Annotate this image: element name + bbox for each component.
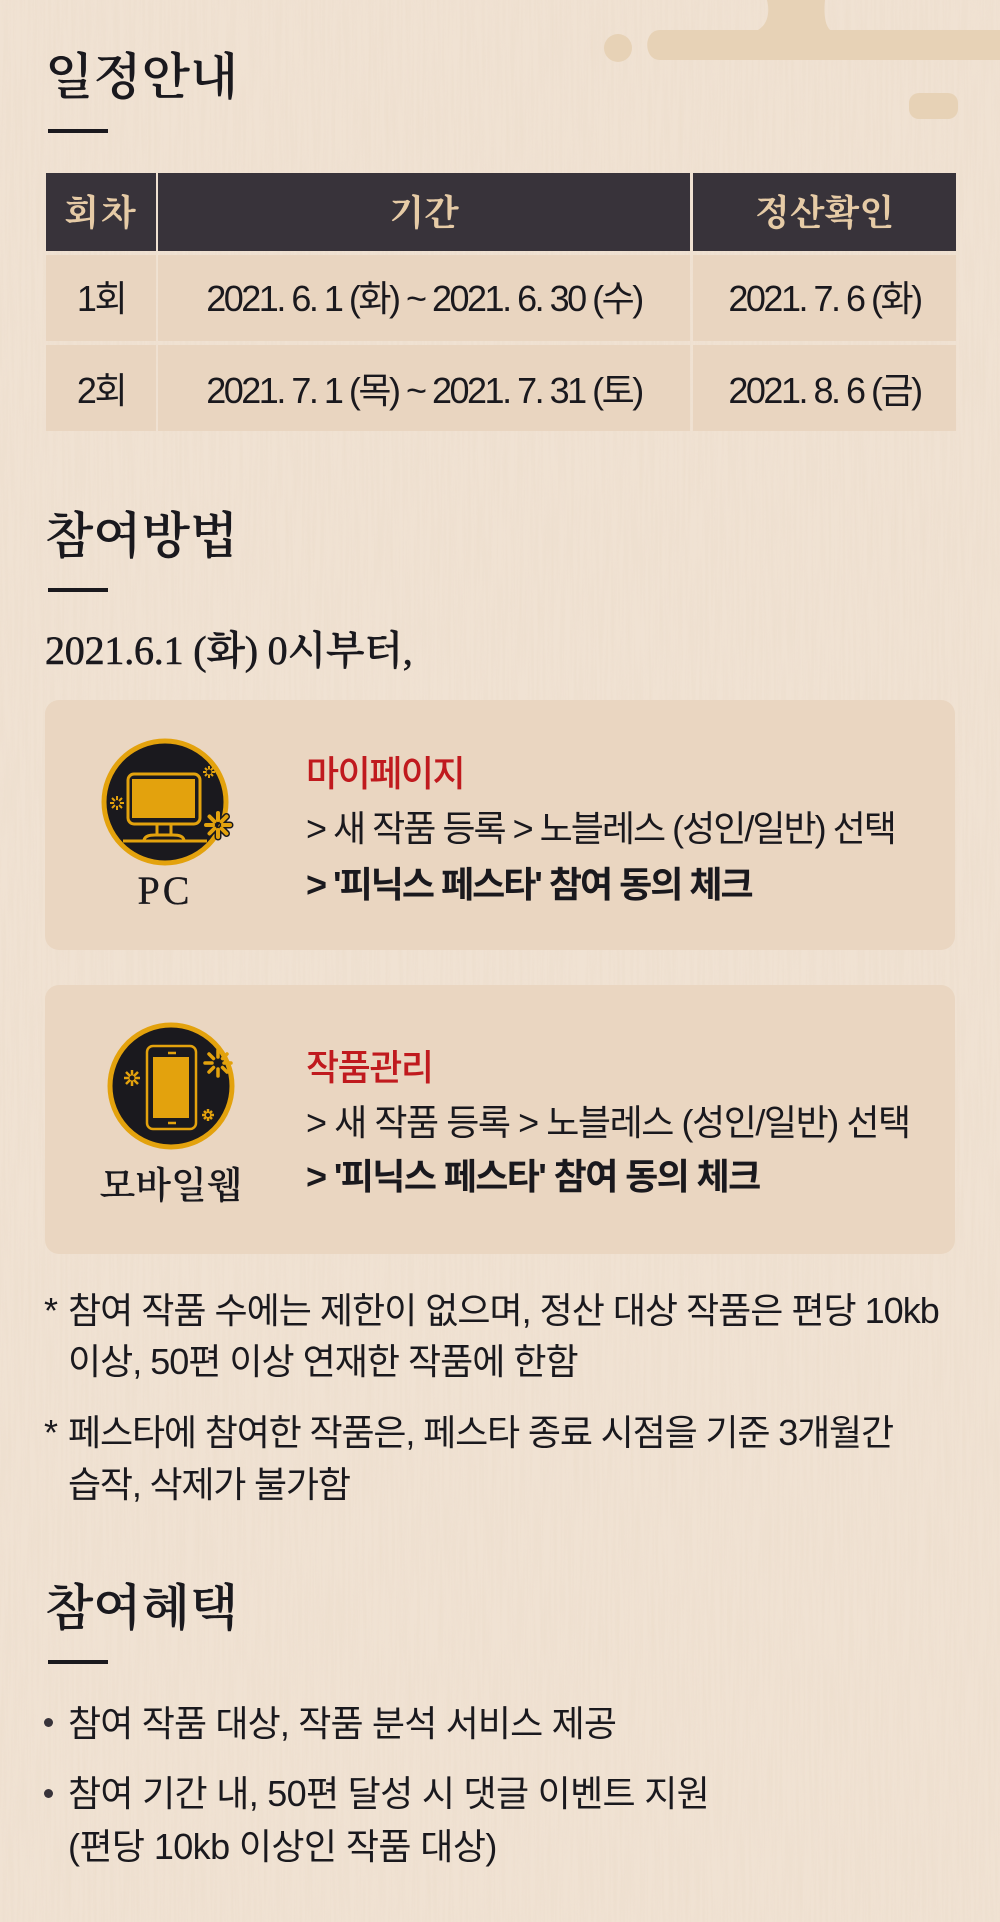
- step: agree check: > '피닉스 페스타' 참여 동의 체크: [306, 1156, 760, 1197]
- step title: my page: 마이페이지: [306, 753, 464, 794]
- table header: settlement: 정산확인: [755, 192, 894, 232]
- panel: PC: [45, 700, 955, 950]
- table header: round: 회차: [64, 192, 138, 232]
- step title: work management: 작품관리: [306, 1047, 432, 1088]
- heading: schedule: 일정안내: [45, 49, 238, 105]
- benefit 1 text: 참여 작품 대상, 작품 분석 서비스 제공: [68, 1703, 616, 1744]
- start date text: 2021.6.1 (화) 0시부터,: [45, 628, 413, 673]
- row 1 settlement: 2021. 7. 6 (화): [728, 278, 921, 319]
- PC steps text: [306, 753, 895, 905]
- table header: period: 기간: [389, 192, 459, 232]
- mobile steps text: [306, 1047, 910, 1197]
- table header: round: [46, 173, 156, 251]
- row 1 period: [158, 255, 690, 341]
- row 2 period: 2021. 7. 1 (목) ~ 2021. 7. 31 (토): [206, 370, 642, 411]
- label: PC: PC: [138, 868, 192, 913]
- note 2 marker: *: [44, 1412, 57, 1453]
- icon: PC monitor: [102, 738, 234, 866]
- decorative clouds: [604, 0, 1000, 119]
- benefit 2 line 1: 참여 기간 내, 50편 달성 시 댓글 이벤트 지원: [68, 1773, 709, 1814]
- row 1 round: 1회: [77, 278, 125, 319]
- note 1 line 1: 참여 작품 수에는 제한이 없으며, 정산 대상 작품은 편당 10kb: [68, 1290, 939, 1331]
- benefits list: [44, 1703, 709, 1867]
- row 2 period: [158, 345, 690, 431]
- bullet 1: [44, 1718, 53, 1727]
- note 1 line 2: 이상, 50편 이상 연재한 작품에 한함: [68, 1341, 578, 1382]
- heading: benefits: 참여혜택: [45, 1580, 238, 1636]
- panel: mobile web: [45, 985, 955, 1254]
- row 1 period: 2021. 6. 1 (화) ~ 2021. 6. 30 (수): [206, 278, 642, 319]
- note 2 line 1: 페스타에 참여한 작품은, 페스타 종료 시점을 기준 3개월간: [68, 1412, 893, 1453]
- step: agree check: > '피닉스 페스타' 참여 동의 체크: [306, 864, 752, 905]
- benefit 2 line 2: (편당 10kb 이상인 작품 대상): [68, 1826, 497, 1867]
- table header: settlement: [693, 173, 956, 251]
- row 2 settlement: 2021. 8. 6 (금): [728, 370, 921, 411]
- schedule table: [46, 173, 956, 431]
- note 2 line 2: 습작, 삭제가 불가함: [68, 1464, 350, 1505]
- bullet 2: [44, 1789, 53, 1798]
- table header: period: [158, 173, 690, 251]
- heading: how to participate: 참여방법: [45, 508, 238, 564]
- step: register path: > 새 작품 등록 > 노블레스 (성인/일반) 선택: [306, 808, 895, 849]
- row 1 round: [46, 255, 156, 341]
- step: register path: > 새 작품 등록 > 노블레스 (성인/일반) 선택: [306, 1102, 910, 1143]
- row 2 settlement: [693, 345, 956, 431]
- notes: [44, 1290, 939, 1505]
- label: mobile web: 모바일웹: [100, 1166, 242, 1207]
- row 2 round: [46, 345, 156, 431]
- icon: smartphone: [108, 1022, 234, 1150]
- row 1 settlement: [693, 255, 956, 341]
- note 1 marker: *: [44, 1290, 57, 1331]
- row 2 round: 2회: [77, 370, 125, 411]
